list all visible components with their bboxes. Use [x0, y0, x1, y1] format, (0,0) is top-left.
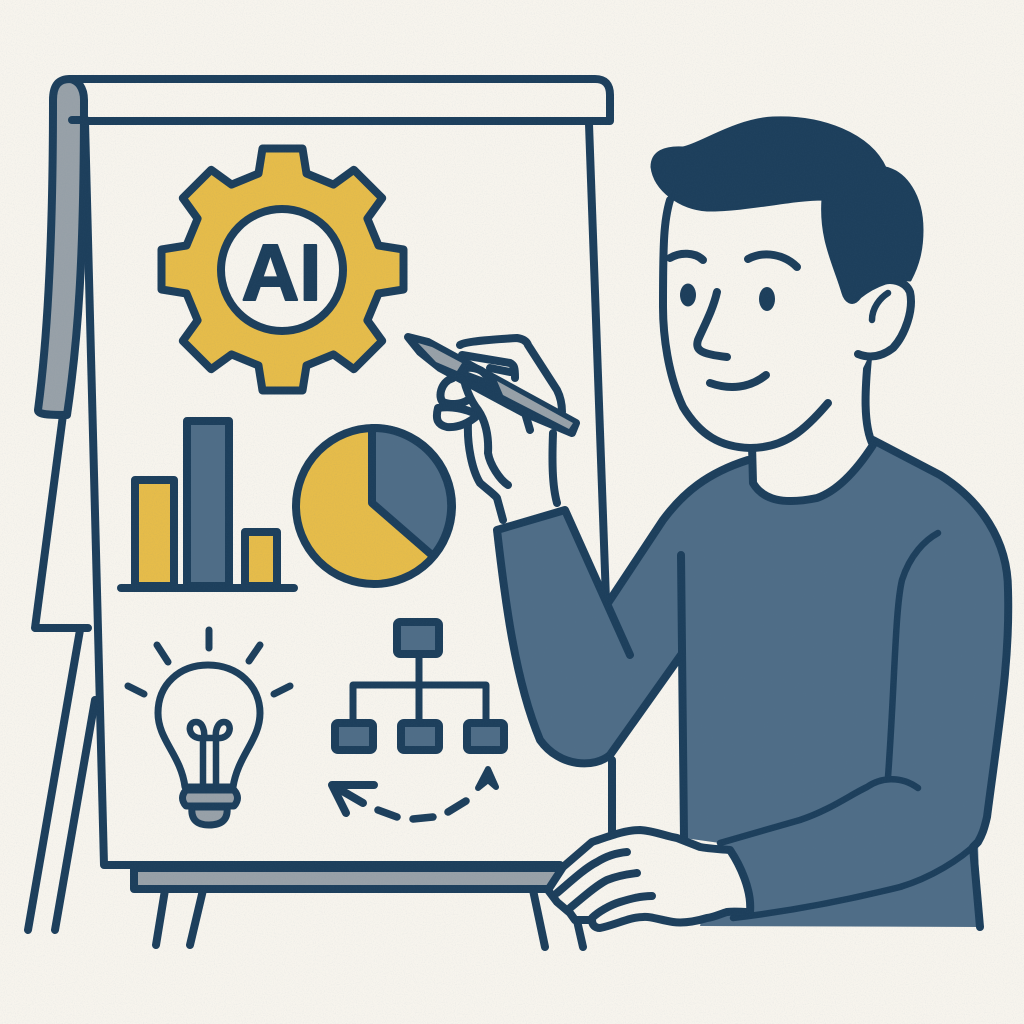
lower hand: [548, 830, 750, 928]
icon: light bulb: [128, 630, 290, 825]
icon: AI gear: AI: [242, 228, 322, 317]
bar chart: [121, 421, 294, 588]
eyebrows: [670, 254, 797, 267]
easel legs: [28, 630, 612, 947]
board header: [70, 79, 610, 121]
tray: [134, 868, 560, 889]
icon: AI gear: [162, 148, 404, 390]
upper hand: [408, 337, 576, 520]
ear: [858, 280, 911, 356]
sweater outlines: [497, 440, 1008, 927]
back sheet: [35, 415, 88, 628]
neck and collar: [752, 358, 873, 501]
sweater fold lines: [720, 533, 978, 918]
folded pages: [38, 79, 86, 415]
board page: [85, 122, 607, 865]
person: [408, 118, 1008, 928]
face: [662, 170, 880, 448]
sweater body: [497, 443, 1008, 927]
mouth: [710, 375, 766, 387]
pie chart: [296, 428, 452, 584]
eyes: [680, 284, 775, 311]
hair: [652, 118, 922, 302]
icon: org chart with cycle arrow: [332, 622, 504, 819]
nose: [697, 292, 727, 357]
flip chart easel: [28, 79, 612, 947]
